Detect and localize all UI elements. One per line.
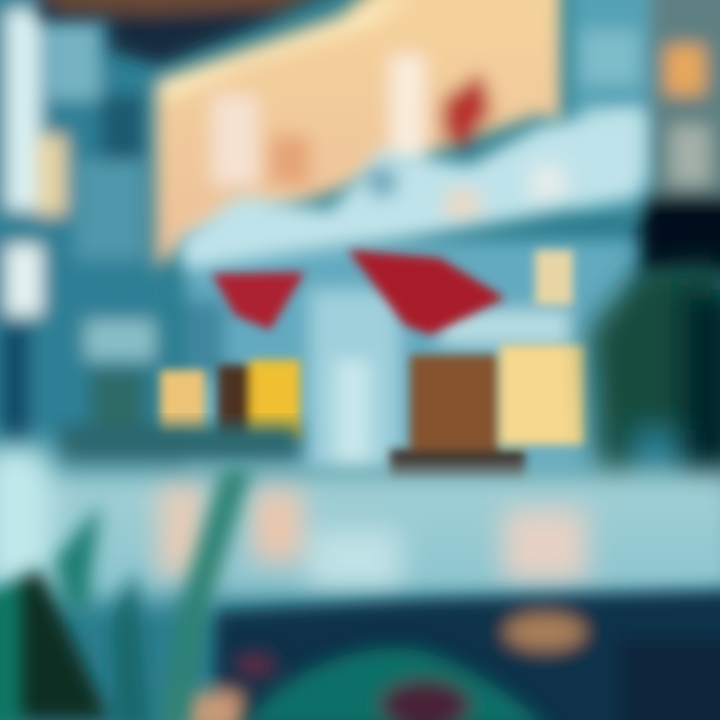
panel: windows and door xyxy=(160,250,585,480)
icon: red awnings xyxy=(212,250,505,335)
panel: dark roof edge xyxy=(30,0,350,65)
panel: green shrub right xyxy=(590,260,720,490)
icon: foreground plant leaves xyxy=(0,468,252,720)
panel: dark foreground water xyxy=(180,590,720,720)
panel: reflective ground xyxy=(0,445,720,600)
panel: right tower xyxy=(570,0,720,275)
panel: warm ceiling xyxy=(155,0,562,270)
panel: building facade xyxy=(185,240,635,470)
icon: teal foreground shape xyxy=(233,648,550,720)
panel: pale roof band xyxy=(180,110,640,270)
panel: left tower xyxy=(0,0,170,460)
panel: shrub left base xyxy=(60,425,300,465)
